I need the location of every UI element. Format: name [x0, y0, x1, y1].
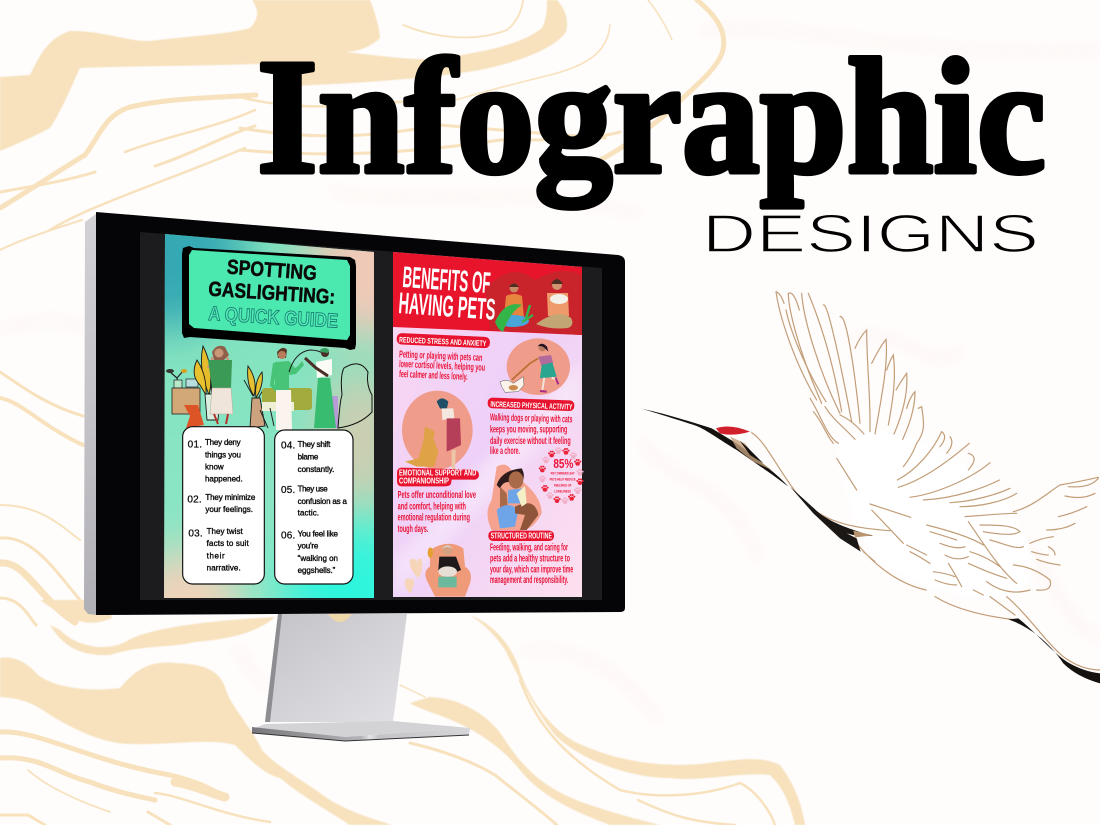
card: items 01 to 03: They twist: [207, 527, 243, 536]
card: items 01 to 03: They minimize: [205, 493, 256, 502]
checklist cards: [183, 427, 353, 584]
card: items 01 to 03: 03.: [188, 528, 203, 539]
red crown: [716, 426, 750, 435]
crane illustration: [642, 292, 1100, 683]
icon: yellow plant: [194, 346, 220, 420]
header band: BENEFITS OF: [402, 261, 492, 300]
stand: [252, 614, 470, 741]
stat: 85 percent with paw ring: PET OWNERS SAY: [551, 470, 575, 475]
black leg tip: [1008, 618, 1100, 683]
card: items 04 to 06: you're: [298, 542, 319, 551]
heading text: [208, 256, 339, 333]
card: items 04 to 06: They use: [298, 485, 328, 494]
heading text: GASLIGHTING:: [208, 278, 336, 309]
icon: person with iguana: [495, 284, 533, 332]
right poster: benefits of having pets: [393, 252, 584, 600]
icon: woman covering ears: [208, 346, 233, 424]
stat: 85 percent with paw ring: LONELINESS: [554, 488, 571, 493]
card: items 04 to 06: [275, 430, 353, 584]
card: items 04 to 06: 05.: [281, 485, 295, 496]
card: items 01 to 03: facts to suit: [207, 539, 249, 548]
icon: woman with dog: [402, 391, 473, 472]
icon: arc and woman in white: [289, 348, 336, 428]
card: items 01 to 03: 02.: [187, 494, 202, 505]
section: emotional support: COMPANIONSHIP: [399, 477, 449, 486]
left poster: spotting gaslighting: [164, 234, 374, 598]
card: items 04 to 06: eggshells.”: [298, 566, 336, 575]
section: reduced stress: feel calmer and less lonely.: [399, 369, 468, 383]
primary feathers: [776, 292, 826, 402]
section: structured routine: [488, 531, 574, 586]
card: items 04 to 06: blame: [298, 452, 319, 461]
icon: second plant and pot: [244, 366, 265, 428]
section: reduced stress: [396, 333, 490, 383]
inner wing: [810, 398, 838, 443]
card: items 01 to 03: [183, 427, 264, 584]
section: emotional support: [397, 468, 479, 535]
section: emotional support: tough days.: [398, 524, 428, 535]
heading text: A QUICK GUIDE: [208, 303, 339, 333]
section: emotional support: Pets offer unconditional love: [398, 490, 476, 501]
heading plaque: [182, 246, 356, 350]
section: increased activity: INCREASED PHYSICAL ACTIVITY: [490, 400, 573, 412]
silver side edge: [84, 213, 97, 615]
lower body and legs: [857, 543, 1100, 670]
section: reduced stress: lower cortisol levels, helping you: [399, 359, 485, 374]
card: items 04 to 06: confusion as a: [298, 497, 348, 506]
section: structured routine: Feeding, walking, and caring for: [490, 542, 568, 553]
section: structured routine: your day, which can improve time: [490, 564, 574, 575]
icon: person with cat: [536, 279, 572, 328]
icon: sofa: [260, 388, 338, 428]
bezel: [96, 212, 625, 615]
card: items 04 to 06: tactic.: [298, 509, 319, 518]
stat: 85 percent with paw ring: FEELINGS OF: [554, 482, 572, 487]
section: reduced stress: Petting or playing with pets can: [399, 349, 483, 364]
screen background: [140, 232, 602, 600]
card: items 01 to 03: their: [207, 551, 225, 560]
poster title: [398, 261, 497, 327]
header band: [393, 252, 582, 335]
section: increased activity: Walking dogs or playing with cats: [490, 412, 573, 425]
stat: 85 percent with paw ring: [539, 447, 584, 504]
card: items 04 to 06: They shift: [298, 440, 331, 449]
card: items 04 to 06: “walking on: [298, 554, 338, 563]
icon: woman holding pet: [487, 465, 542, 530]
icon: small plant and shelf: [166, 369, 204, 428]
section: reduced stress: REDUCED STRESS AND ANXIETY: [399, 335, 487, 348]
card: items 01 to 03: things you: [205, 450, 241, 459]
stat: 85 percent with paw ring: PETS HELP REDUCE: [550, 476, 576, 481]
section: increased activity: like a chore.: [490, 446, 520, 457]
card: items 01 to 03: narrative.: [207, 564, 241, 573]
section: emotional support: EMOTIONAL SUPPORT AND: [399, 469, 476, 478]
icon: man in green: [272, 348, 304, 430]
section: increased activity: [488, 397, 574, 457]
secondary feathers: [897, 432, 945, 480]
section: structured routine: pets add a healthy structure to: [490, 553, 570, 564]
right poster contents: [396, 333, 584, 597]
heading text: SPOTTING: [226, 256, 318, 285]
card: items 04 to 06: 06.: [281, 530, 295, 541]
title: Infographic: [257, 25, 1046, 209]
subtitle: DESIGNS: [702, 204, 1039, 264]
gold swirls: [0, 0, 805, 825]
card: items 01 to 03: 01.: [188, 439, 202, 450]
icon: girl walking dog: [500, 338, 570, 395]
tail: [1013, 477, 1098, 565]
monitor: [84, 170, 625, 741]
header band: HAVING PETS: [398, 287, 497, 327]
card: items 01 to 03: They deny: [205, 438, 241, 447]
section: emotional support: emotional regulation during: [398, 513, 470, 524]
section: emotional support: and comfort, helping with: [398, 501, 466, 512]
icon: elder with cat in armchair: [405, 544, 471, 597]
section: structured routine: STRUCTURED ROUTINE: [491, 532, 552, 541]
section: increased activity: keeps you moving, supporting: [490, 424, 567, 435]
stat: 85 percent with paw ring: 85%: [553, 456, 573, 471]
card: items 04 to 06: constantly.: [298, 465, 334, 474]
card: items 04 to 06: 04.: [281, 441, 295, 452]
section: structured routine: management and responsibility.: [490, 575, 568, 586]
people and plants scene: [166, 346, 372, 430]
card: items 04 to 06: You feel like: [298, 530, 339, 539]
section: increased activity: daily exercise without it feeling: [490, 436, 571, 447]
body: [837, 458, 911, 543]
icon: outlined blob: [338, 364, 372, 428]
beak and black neck: [642, 409, 788, 487]
neck: [752, 433, 890, 531]
card: items 01 to 03: your feelings.: [205, 505, 253, 514]
card: items 01 to 03: know: [205, 462, 224, 471]
card: items 01 to 03: happened.: [205, 475, 243, 484]
